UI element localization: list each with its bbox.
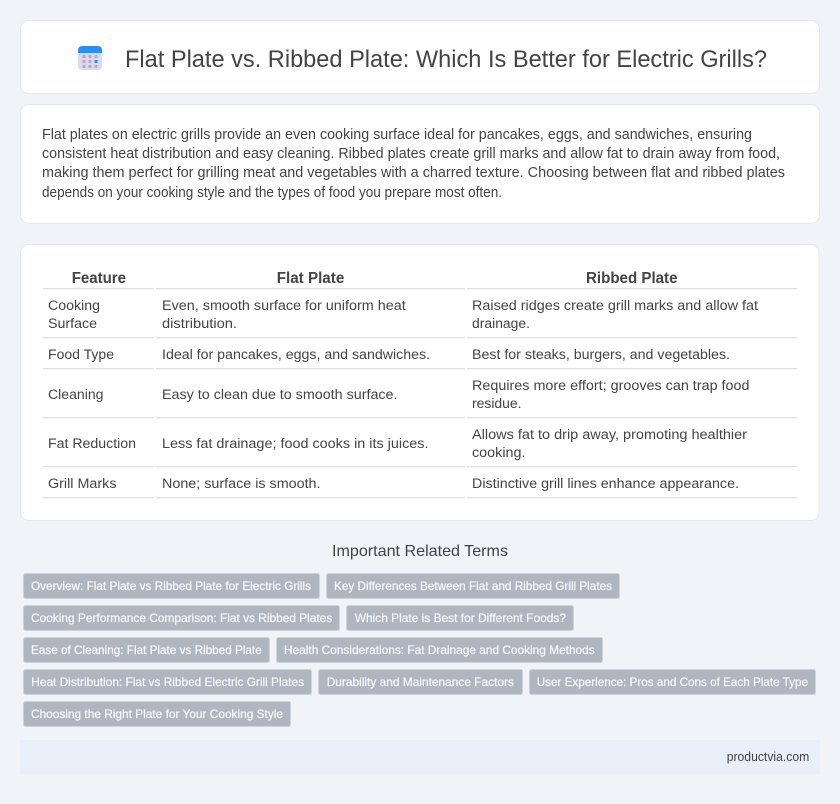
table row: food type [43, 347, 797, 369]
tag: Durability and Maintenance Factors [327, 675, 514, 689]
table row: cooking surface: Surface [48, 316, 97, 332]
table row: cooking surface: distribution. [162, 316, 237, 332]
table row: cleaning: Cleaning [48, 387, 104, 403]
table row: fat reduction: Fat Reduction [48, 436, 136, 452]
table row: fat reduction [43, 427, 797, 467]
table row: cleaning: residue. [472, 396, 522, 412]
panel: comparison table [20, 244, 819, 520]
table row: cooking surface [43, 298, 797, 338]
table row: cooking surface: Raised ridges create grill marks and allow fat [472, 298, 758, 314]
table row: food type: Food Type [48, 347, 114, 363]
text block: introduction: making them perfect for grilling meat and vegetables with a charred texture. Choosing between flat and ribbed plates [42, 165, 785, 181]
table row: fat reduction: Less fat drainage; food cooks in its juices. [162, 436, 428, 452]
table row: fat reduction: Allows fat to drip away, promoting healthier [472, 427, 747, 443]
tag [24, 702, 290, 726]
table row: cooking surface: Even, smooth surface for uniform heat [162, 298, 406, 314]
table header row: Ribbed Plate [586, 270, 678, 287]
tag [24, 670, 312, 694]
text block: introduction: Flat plates on electric grills provide an even cooking surface ideal for pancakes, eggs, and sandwiches, ensuring [42, 127, 752, 143]
tag: Health Considerations: Fat Drainage and Cooking Methods [284, 643, 595, 657]
table row: food type: Best for steaks, burgers, and vegetables. [472, 347, 730, 363]
tag [24, 606, 340, 630]
table row: grill marks [43, 476, 797, 498]
table row: cleaning: Easy to clean due to smooth surface. [162, 387, 398, 403]
tag [530, 670, 816, 694]
tag: Which Plate is Best for Different Foods? [355, 611, 566, 625]
tag: Heat Distribution: Flat vs Ribbed Electric Grill Plates [31, 675, 304, 689]
tag [24, 574, 320, 598]
tag [346, 606, 574, 630]
text block: introduction: depends on your cooking style and the types of food you prepare most often. [42, 185, 502, 201]
table header row: Flat Plate [277, 270, 345, 287]
table row: cooking surface: Cooking [48, 298, 100, 314]
table header row: Feature [72, 270, 126, 287]
panel: introduction paragraph [20, 104, 820, 224]
table row: grill marks: Grill Marks [48, 476, 117, 492]
footer source text: productvia.com [727, 750, 809, 764]
tag [326, 574, 620, 598]
table row: grill marks: Distinctive grill lines enhance appearance. [472, 476, 739, 492]
table header row [43, 270, 797, 289]
table row: fat reduction: cooking. [472, 445, 526, 461]
icon: calendar [78, 46, 102, 70]
tag: User Experience: Pros and Cons of Each Plate Type [537, 675, 808, 689]
panel: title header [20, 20, 820, 94]
tag: Key Differences Between Flat and Ribbed Grill Plates [334, 579, 612, 593]
tag [276, 638, 602, 662]
footer bar [20, 740, 820, 774]
table row: food type: Ideal for pancakes, eggs, and sandwiches. [162, 347, 430, 363]
table row: cleaning [43, 378, 797, 418]
tag: Overview: Flat Plate vs Ribbed Plate for Electric Grills [31, 579, 311, 593]
heading: important related terms: Important Related Terms [332, 543, 508, 560]
table row: cooking surface: drainage. [472, 316, 530, 332]
tag group: related terms [24, 574, 816, 726]
tag: Choosing the Right Plate for Your Cooking Style [31, 707, 283, 721]
tag [24, 638, 270, 662]
tag [318, 670, 522, 694]
text block: introduction: consistent heat distribution and easy cleaning. Ribbed plates create grill marks and allow fat to drain away from food, [42, 146, 780, 162]
title: Flat Plate vs. Ribbed Plate: Which Is Better for Electric Grills? [125, 46, 767, 73]
tag: Ease of Cleaning: Flat Plate vs Ribbed Plate [31, 643, 262, 657]
table row: cleaning: Requires more effort; grooves can trap food [472, 378, 750, 394]
text block: introduction [42, 127, 785, 201]
table row: grill marks: None; surface is smooth. [162, 476, 320, 492]
tag: Cooking Performance Comparison: Flat vs Ribbed Plates [31, 611, 332, 625]
